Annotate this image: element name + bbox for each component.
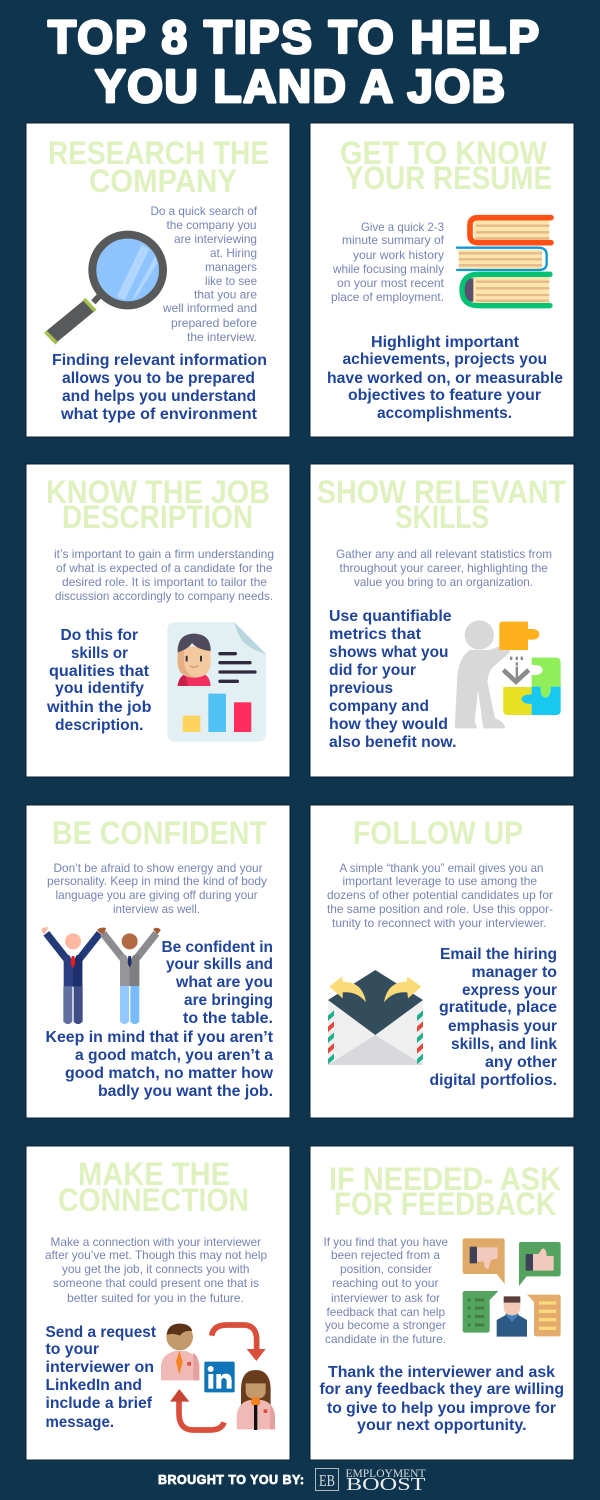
text: research intro: prepared before <box>171 316 257 330</box>
panel: get to know your resume <box>310 123 574 437</box>
text: resume intro: while focusing mainly <box>332 262 444 276</box>
text: skills takeaway: metrics that <box>329 626 421 643</box>
text: resume takeaway: Highlight important <box>371 334 519 351</box>
text: skills takeaway: did for your <box>329 662 416 679</box>
icon: resume document <box>167 622 266 742</box>
text: follow up takeaway: gratitude, place <box>439 999 557 1016</box>
icon: linkedin connection <box>161 1324 275 1430</box>
text: feedback takeaway: Thank the interviewer and ask <box>328 1364 555 1381</box>
text: resume takeaway <box>327 334 563 422</box>
text: follow up takeaway: Email the hiring <box>440 946 557 963</box>
text: job description takeaway: qualities that <box>49 663 149 680</box>
text: skills takeaway: how they would <box>329 716 448 733</box>
text: connection takeaway: Send a request <box>46 1324 156 1341</box>
heading: know the job description: DESCRIPTION <box>62 499 253 535</box>
text: confidence takeaway: your skills and <box>166 956 273 973</box>
text: resume takeaway: accomplishments. <box>377 405 512 422</box>
text: connection intro: Make a connection with your interviewer <box>50 1235 261 1249</box>
text: feedback takeaway: to give to help you improve for <box>327 1400 556 1417</box>
text: research intro: Do a quick search of <box>150 204 258 218</box>
text: job description intro: of what is expected of a candidate for the <box>56 561 273 575</box>
panel: know the job description <box>26 464 290 777</box>
title: YOU LAND A JOB <box>95 60 505 112</box>
icon: stack of books <box>457 218 551 306</box>
text: follow up takeaway: express your <box>462 982 557 999</box>
text: connection takeaway: message. <box>46 1414 114 1431</box>
text: feedback takeaway: for any feedback they are willing <box>320 1381 564 1398</box>
text: connection intro: you get the job, it connects you with <box>62 1262 250 1276</box>
text: confidence intro: personality. Keep in mind the kind of body <box>47 874 267 888</box>
text: feedback intro: reaching out to your <box>332 1276 438 1290</box>
text: follow up intro: tunity to reconnect with your interviewer. <box>332 916 546 930</box>
text: research intro: well informed and <box>162 301 257 315</box>
text: follow up intro: dozens of other potential candidates up for <box>327 888 553 902</box>
text: feedback intro: feedback that can help <box>326 1305 445 1319</box>
text: skills intro <box>336 547 552 589</box>
text: confidence takeaway: a good match, you aren’t a <box>75 1047 273 1064</box>
logo: employment boost: BOOST <box>346 1474 426 1494</box>
text: connection takeaway: LinkedIn and <box>46 1377 142 1394</box>
text: skills takeaway: shows what you <box>329 644 448 661</box>
text: resume intro: your work history <box>353 248 444 262</box>
text: research intro: the company you <box>166 218 256 232</box>
heading: know the job description: KNOW THE JOB <box>46 474 270 510</box>
panel: research the company <box>26 123 290 437</box>
heading: show relevant skills: SHOW RELEVANT <box>317 474 566 510</box>
text: skills intro: throughout your career, highlighting the <box>340 561 548 575</box>
text: skills intro: Gather any and all relevant statistics from <box>336 547 552 561</box>
text: connection intro: better suited for you in the future. <box>67 1291 244 1305</box>
text: connection takeaway <box>46 1324 156 1431</box>
text: resume takeaway: have worked on, or measurable <box>327 370 563 387</box>
text: feedback intro: been rejected from a <box>331 1248 440 1262</box>
text: resume takeaway: objectives to feature your <box>348 387 541 404</box>
text: research takeaway: and helps you understand <box>62 388 256 405</box>
text: confidence takeaway: badly you want the job. <box>98 1083 273 1100</box>
text: skills takeaway: Use quantifiable <box>329 608 452 625</box>
panel: make the connection <box>26 1146 290 1460</box>
panel: ask for feedback <box>310 1146 574 1460</box>
text: connection intro: someone that could present one that is <box>53 1276 259 1290</box>
text: resume intro: Give a quick 2-3 <box>361 220 444 234</box>
footer: brought to you by: BROUGHT TO YOU BY: <box>158 1473 304 1487</box>
text: confidence takeaway: what are you <box>175 974 273 991</box>
text: confidence takeaway: Keep in mind that if you aren’t <box>46 1029 273 1046</box>
text: connection intro <box>45 1235 267 1305</box>
text: follow up intro: the same position and role. Use this oppor- <box>327 902 553 916</box>
text: confidence takeaway: to the table. <box>183 1010 273 1027</box>
icon: magnifying glass <box>45 235 163 343</box>
heading: be confident: BE CONFIDENT <box>52 815 267 851</box>
text: feedback takeaway: your next opportunity. <box>357 1417 527 1434</box>
title: TOP 8 TIPS TO HELP <box>48 11 539 63</box>
text: job description takeaway: you identify <box>55 680 144 697</box>
text: research intro: are interviewing <box>174 232 257 246</box>
text: follow up intro: A simple “thank you” email gives you an <box>340 861 544 875</box>
text: research intro: at. Hiring <box>210 246 257 260</box>
text: research intro: that you are <box>194 288 257 302</box>
heading: get to know your resume <box>340 135 552 196</box>
text: follow up takeaway: skills, and link <box>451 1036 557 1053</box>
text: follow up takeaway: any other <box>485 1054 557 1071</box>
text: research takeaway: what type of environment <box>60 406 257 423</box>
text: confidence takeaway <box>46 939 274 1100</box>
text: confidence intro: language you are giving off during your <box>56 888 258 902</box>
heading: ask for feedback <box>329 1161 561 1222</box>
text: confidence intro <box>47 861 267 916</box>
text: feedback intro: you become a stronger <box>325 1318 446 1332</box>
text: skills takeaway: company and <box>329 698 429 715</box>
heading: ask for feedback: IF NEEDED- ASK <box>329 1161 561 1197</box>
heading: make the connection: MAKE THE <box>78 1156 230 1192</box>
text: resume intro <box>331 220 445 304</box>
text: resume intro: minute summary of <box>342 233 445 247</box>
heading: ask for feedback: FOR FEEDBACK <box>334 1186 556 1222</box>
text: research takeaway: Finding relevant information <box>52 352 267 369</box>
logo: employment boost: EMPLOYMENT <box>346 1468 426 1480</box>
heading: make the connection: CONNECTION <box>58 1182 249 1218</box>
text: resume takeaway: achievements, projects you <box>342 351 547 368</box>
text: job description takeaway: description. <box>55 717 144 734</box>
heading: know the job description <box>46 474 270 535</box>
text: confidence intro: Don’t be afraid to show energy and your <box>54 861 263 875</box>
heading: research the company <box>48 135 269 199</box>
text: resume intro: place of employment. <box>331 290 444 304</box>
logo: employment boost: EB <box>319 1471 335 1490</box>
heading: get to know your resume: YOUR RESUME <box>345 160 552 196</box>
text: research intro: the interview. <box>187 330 257 344</box>
text: research intro: like to see <box>205 274 257 288</box>
text: skills takeaway: previous <box>329 680 393 697</box>
text: connection takeaway: to your <box>46 1341 99 1358</box>
text: feedback intro <box>324 1235 448 1346</box>
text: job description intro <box>54 547 274 603</box>
text: job description takeaway <box>46 627 152 734</box>
text: job description intro: discussion accordingly to company needs. <box>55 589 273 603</box>
text: connection takeaway: include a brief <box>46 1395 153 1412</box>
text: research takeaway: allows you to be prepared <box>62 370 255 387</box>
text: job description takeaway: skills or <box>71 645 128 662</box>
text: follow up takeaway <box>430 946 557 1089</box>
text: job description takeaway: within the job <box>46 699 152 716</box>
panel: be confident <box>26 805 290 1118</box>
text: follow up takeaway: digital portfolios. <box>430 1072 557 1089</box>
text: follow up intro: important leverage to use among the <box>342 874 537 888</box>
text: skills takeaway: also benefit now. <box>329 734 456 751</box>
icon: feedback bubbles <box>463 1238 561 1337</box>
text: follow up takeaway: emphasis your <box>448 1018 557 1035</box>
text: confidence intro: interview as well. <box>113 902 200 916</box>
heading: show relevant skills: SKILLS <box>395 499 489 535</box>
text: feedback takeaway <box>320 1364 564 1434</box>
text: job description intro: desired role. It is important to tailor the <box>62 575 267 589</box>
text: feedback intro: interviewer to ask for <box>331 1291 440 1305</box>
icon: open envelope <box>328 970 423 1065</box>
text: research intro: managers <box>205 260 257 274</box>
text: confidence takeaway: Be confident in <box>162 939 273 956</box>
text: research intro <box>150 204 258 344</box>
panel: follow up <box>310 805 574 1118</box>
panel: show relevant skills <box>310 464 574 777</box>
heading: research the company: COMPANY <box>89 163 237 199</box>
text: feedback intro: position, consider <box>340 1262 432 1276</box>
logo: employment boost <box>316 1468 426 1494</box>
title <box>48 11 539 112</box>
text: feedback intro: If you find that you have <box>324 1235 448 1249</box>
text: follow up takeaway: manager to <box>472 964 557 981</box>
text: job description intro: it’s important to gain a firm understanding <box>54 547 274 561</box>
text: follow up intro <box>327 861 553 930</box>
text: connection takeaway: interviewer on <box>46 1359 154 1376</box>
text: confidence takeaway: good match, no matter how <box>65 1065 274 1082</box>
icon: person with puzzle <box>455 620 561 728</box>
heading: get to know your resume: GET TO KNOW <box>340 135 548 171</box>
text: connection intro: after you’ve met. Though this may not help <box>45 1248 267 1262</box>
text: skills takeaway <box>329 608 456 751</box>
heading: follow up: FOLLOW UP <box>353 815 523 851</box>
text: resume intro: on your most recent <box>337 276 445 290</box>
heading: show relevant skills <box>317 474 566 535</box>
text: confidence takeaway: are bringing <box>184 992 273 1009</box>
text: job description takeaway: Do this for <box>60 627 138 644</box>
text: research takeaway <box>52 352 267 423</box>
heading: make the connection <box>58 1156 249 1218</box>
icon: two professionals celebrating <box>42 928 160 1024</box>
text: feedback intro: candidate in the future. <box>325 1332 446 1346</box>
text: skills intro: value you bring to an organization. <box>354 575 533 589</box>
heading: research the company: RESEARCH THE <box>48 135 269 171</box>
